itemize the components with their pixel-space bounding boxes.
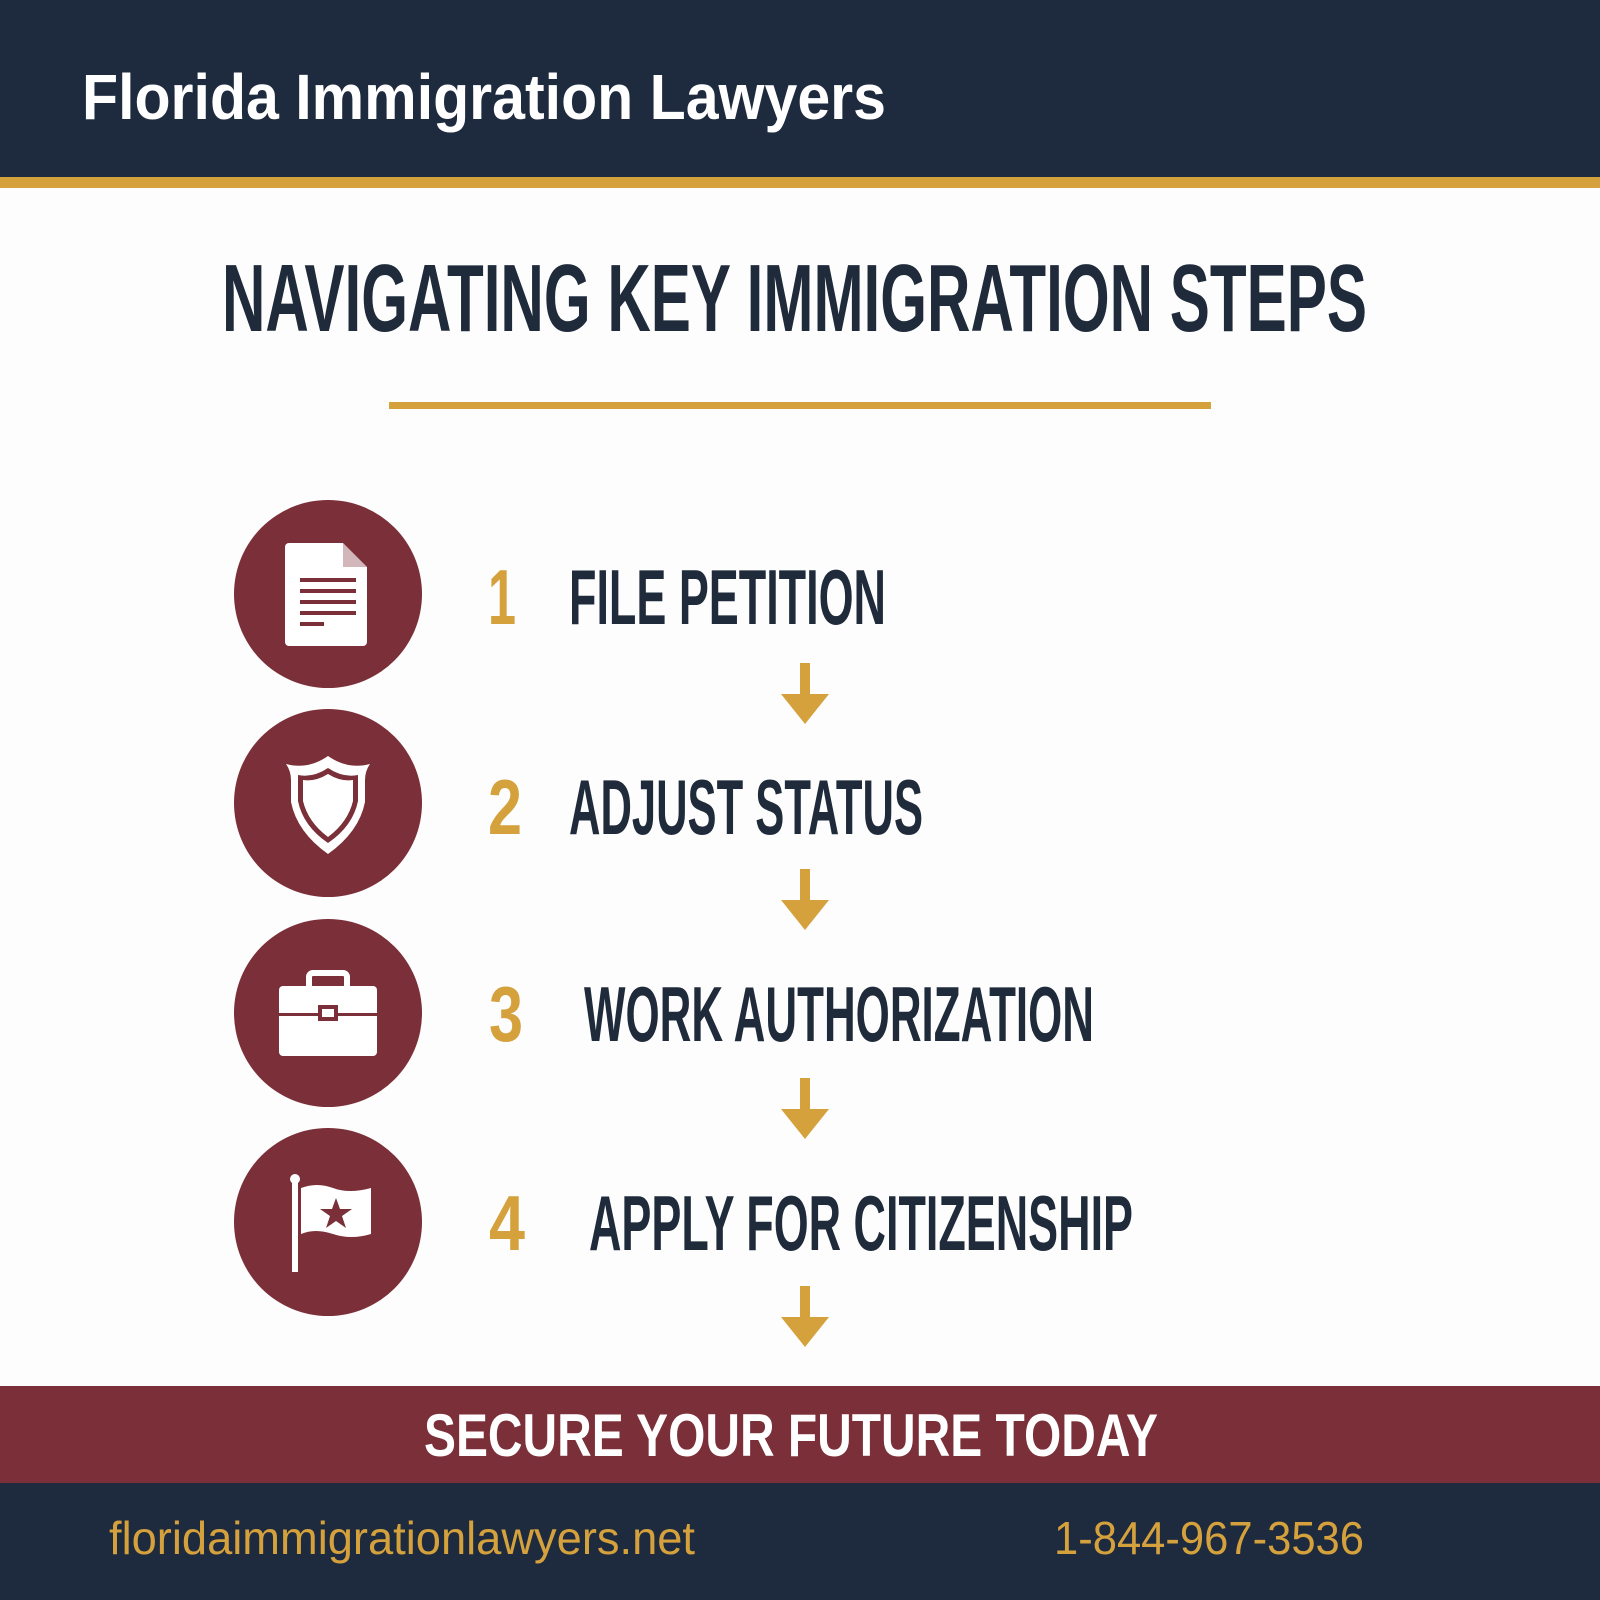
website: floridaimmigrationlawyers.net	[109, 1512, 695, 1564]
arrow 3	[781, 1078, 829, 1139]
step 1	[234, 500, 886, 688]
step 4	[234, 1128, 1133, 1316]
step 4: 4	[489, 1179, 525, 1267]
step 1: FILE PETITION	[569, 553, 886, 641]
arrow 1	[781, 663, 829, 724]
step 2: 2	[488, 763, 522, 851]
icon: document	[234, 500, 422, 688]
phone: 1-844-967-3536	[1054, 1512, 1364, 1564]
step 3: 3	[489, 970, 523, 1058]
icon: flag	[234, 1128, 422, 1316]
call to action band	[0, 1386, 1600, 1484]
header bar	[0, 0, 1600, 188]
icon: briefcase	[234, 919, 422, 1107]
title underline	[389, 402, 1211, 409]
header title: Florida Immigration Lawyers	[82, 61, 886, 133]
arrow 2	[781, 869, 829, 930]
step 1: 1	[488, 553, 516, 641]
step 3	[234, 919, 1094, 1107]
call to action band: SECURE YOUR FUTURE TODAY	[424, 1402, 1158, 1469]
step 2	[234, 709, 923, 897]
step 2: ADJUST STATUS	[569, 763, 923, 851]
icon: shield	[234, 709, 422, 897]
footer	[0, 1483, 1600, 1600]
step 3: WORK AUTHORIZATION	[584, 970, 1094, 1058]
step 4: APPLY FOR CITIZENSHIP	[589, 1179, 1133, 1267]
arrow 4	[781, 1286, 829, 1347]
